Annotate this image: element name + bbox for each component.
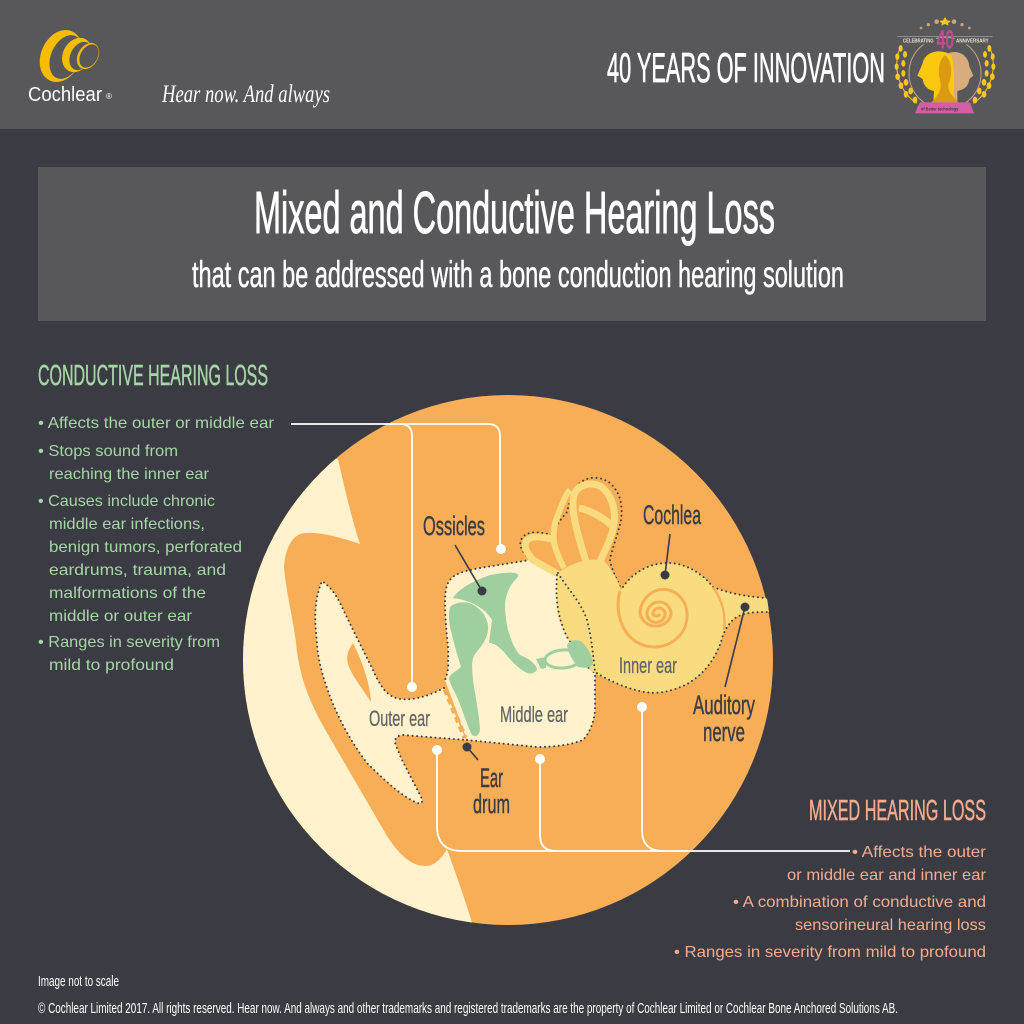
conductive bullet list: benign tumors, perforated [49, 539, 242, 556]
conductive bullet list: mild to profound [49, 657, 174, 674]
conductive bullet list: malformations of the [49, 585, 206, 602]
outer ear canal [315, 581, 466, 803]
label: ear drum: drum [473, 789, 510, 819]
title panel [38, 167, 986, 321]
cream outer region [243, 458, 472, 922]
middle ear [445, 560, 595, 747]
panel: conductive hearing loss [38, 360, 275, 674]
conductive heading: CONDUCTIVE HEARING LOSS [38, 360, 268, 392]
Cochlear logo: ® [106, 92, 112, 101]
conductive bullet list: • Ranges in severity from [38, 634, 220, 651]
conductive bullet list: • Affects the outer or middle ear [38, 415, 275, 432]
conductive bullet list: reaching the inner ear [49, 466, 210, 483]
mixed bullet list [674, 844, 987, 961]
label: auditory nerve [693, 602, 755, 747]
label: cochlea [643, 500, 702, 580]
conductive bullet list: eardrums, trauma, and [49, 562, 226, 579]
label: ossicles [423, 511, 486, 596]
mixed bullet list: • Ranges in severity from mild to profound [674, 944, 986, 961]
panel: mixed hearing loss [674, 795, 987, 961]
tagline: Hear now. And always [161, 81, 330, 108]
label: inner ear: Inner ear [619, 653, 677, 678]
connector: conductive hearing loss [291, 424, 506, 692]
mixed bullet list: sensorineural hearing loss [795, 917, 986, 934]
cochlea spiral [618, 589, 687, 647]
label: cochlea: Cochlea [643, 500, 702, 530]
conductive bullet list: • Stops sound from [38, 443, 178, 460]
mixed bullet list: • Affects the outer [852, 844, 987, 861]
label: ear drum: Ear [480, 763, 503, 793]
semicircular canals [520, 478, 622, 590]
label: auditory nerve: nerve [703, 717, 745, 747]
label: auditory nerve: Auditory [693, 690, 755, 720]
conductive bullet list [38, 415, 275, 674]
label: middle ear: Middle ear [500, 702, 568, 727]
anniversary badge [895, 17, 995, 113]
anniversary badge: 40 [937, 24, 954, 54]
conductive bullet list: middle or outer ear [49, 608, 193, 625]
mixed bullet list: • A combination of conductive and [733, 894, 986, 911]
ear diagram [200, 395, 850, 935]
header band [0, 0, 1024, 129]
eardrum [445, 689, 465, 738]
label: outer ear: Outer ear [369, 706, 430, 731]
Cochlear logo [28, 23, 112, 106]
footnote: image not to scale: Image not to scale [38, 973, 119, 990]
label: ossicles: Ossicles [423, 511, 485, 541]
conductive bullet list: middle ear infections, [49, 516, 205, 533]
anniversary badge: ANNIVERSARY [956, 39, 989, 45]
inner ear and cochlea [556, 560, 769, 693]
Cochlear logo: Cochlear [28, 84, 102, 106]
orange head circle [243, 395, 773, 925]
mixed bullet list: or middle ear and inner ear [787, 867, 987, 884]
anniversary badge: CELEBRATING [903, 39, 934, 45]
label: ear drum [462, 742, 510, 819]
anniversary badge: of Better technology [921, 106, 959, 111]
ossicles [449, 573, 593, 736]
connector: mixed hearing loss [432, 702, 850, 851]
conductive bullet list: • Causes include chronic [38, 493, 215, 510]
